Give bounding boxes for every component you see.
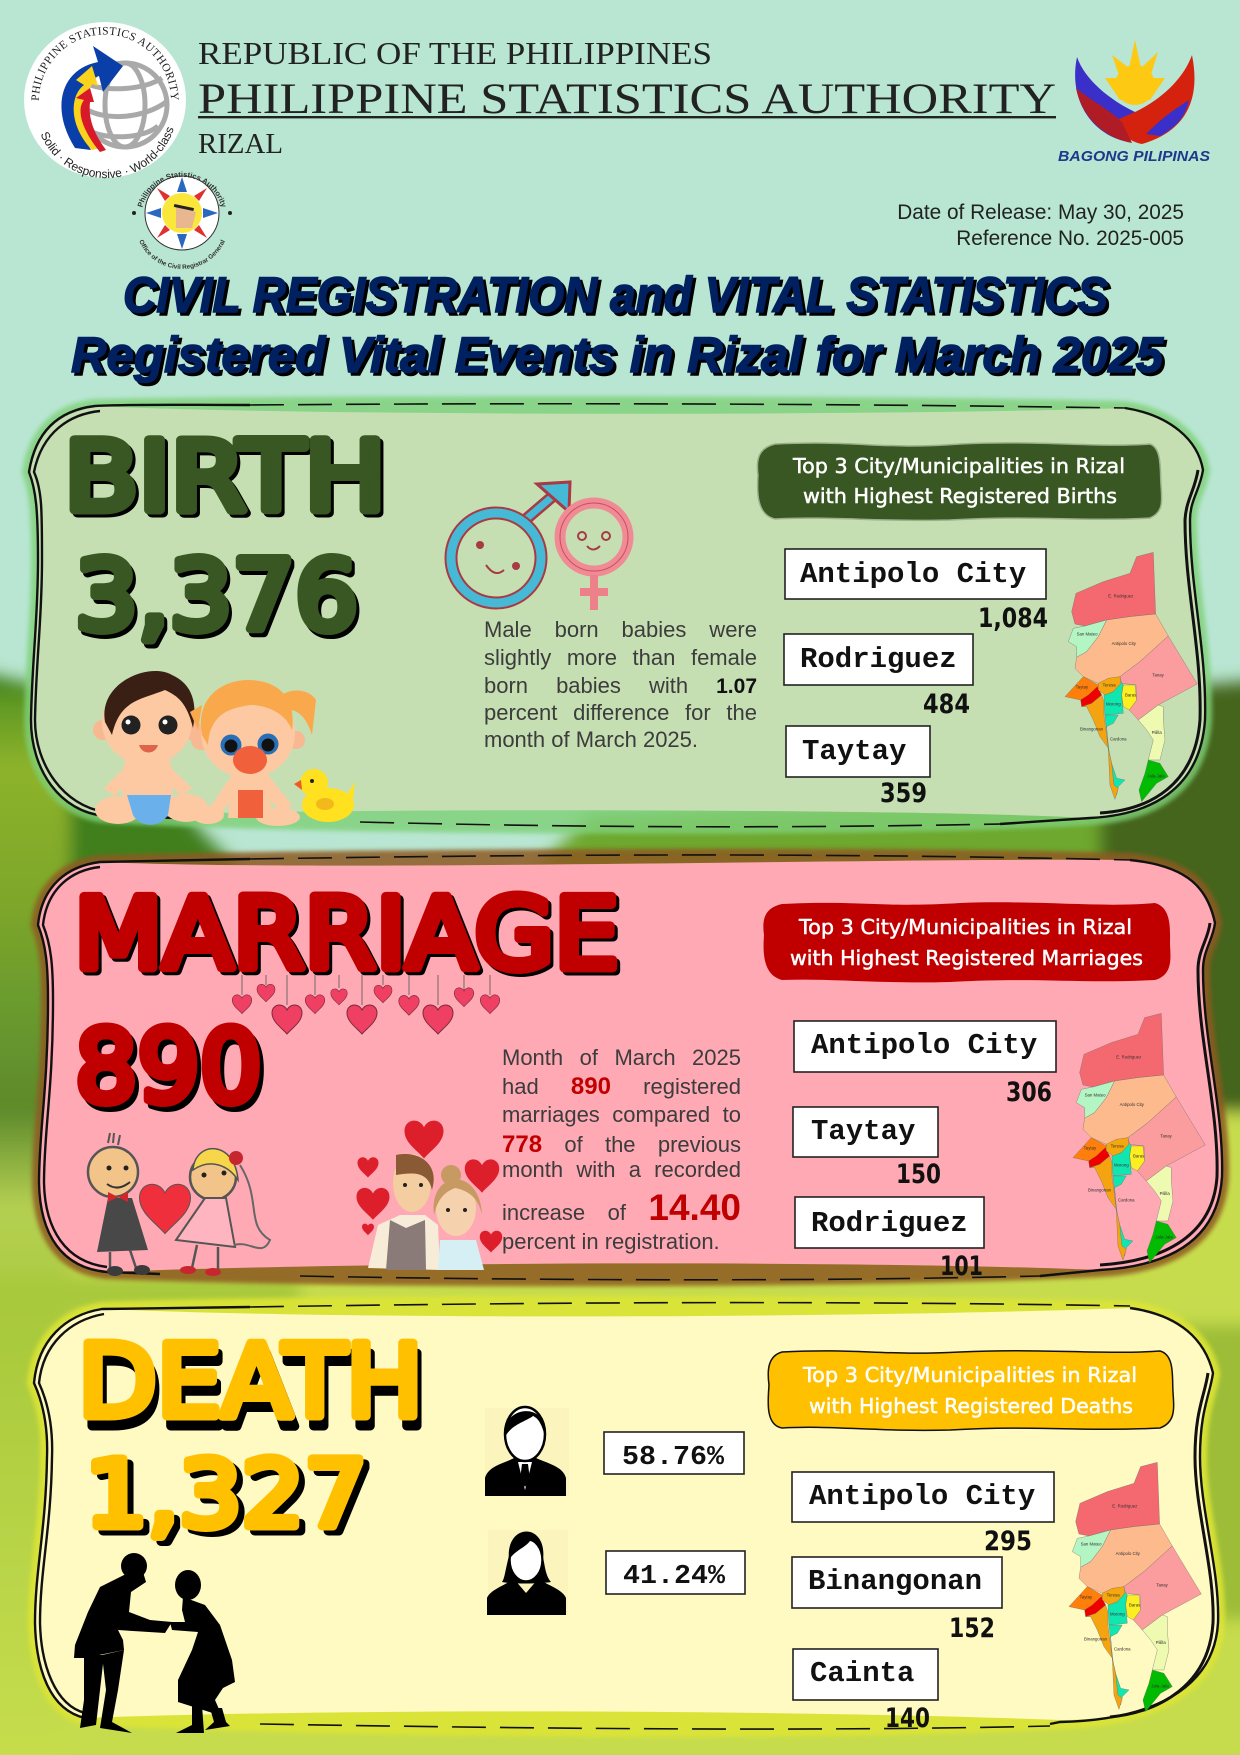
illustration: two babies and a duck bbox=[93, 671, 355, 826]
figure: female share: 41.24% bbox=[623, 1562, 726, 1592]
map: Rizal province: Antipolo City bbox=[1120, 1102, 1145, 1107]
header text bbox=[198, 35, 1056, 160]
map: Rizal province: Baras bbox=[1129, 1603, 1140, 1608]
ranking: Antipolo City 306 bbox=[794, 1021, 1056, 1108]
map: Rizal province: Baras bbox=[1125, 693, 1136, 698]
map: Rizal province: Jala-Jala bbox=[1147, 773, 1165, 778]
text: marriages description: percent in registration. bbox=[502, 1229, 720, 1254]
ranking: Taytay 359: Taytay bbox=[802, 735, 906, 768]
seal motto text: PHILIPPINE STATISTICS AUTHORITY bbox=[31, 26, 179, 101]
release info bbox=[897, 201, 1184, 250]
text: births description: month of March 2025. bbox=[484, 727, 698, 752]
ranking: Antipolo City 295: 295 bbox=[984, 1526, 1032, 1557]
registrar logo arc text: Office of the Civil Registrar General bbox=[140, 240, 225, 270]
map: Rizal province: Tanay bbox=[1160, 1134, 1173, 1139]
title: Registered Vital Events in Rizal for March 2025 bbox=[71, 327, 1164, 383]
map: Rizal province: Teresa bbox=[1103, 682, 1116, 687]
map: Rizal province: Cardona bbox=[1114, 1647, 1131, 1652]
map: Rizal province: E. Rodriguez bbox=[1112, 1503, 1137, 1508]
map: Rizal province: Antipolo City bbox=[1112, 641, 1137, 646]
map: Rizal province: Pililla bbox=[1156, 1640, 1166, 1645]
map: Rizal province: Morong bbox=[1114, 1162, 1129, 1167]
panel: birth bbox=[29, 403, 1205, 827]
ranking: Antipolo City 306: 306 bbox=[1006, 1077, 1052, 1108]
ranking: Taytay 150: 150 bbox=[896, 1159, 941, 1190]
banner: top 3 marriages bbox=[763, 902, 1170, 982]
map: Rizal province bbox=[1065, 552, 1197, 802]
map: Rizal province: Baras bbox=[1133, 1154, 1144, 1159]
map: Rizal province: Binangonan bbox=[1080, 727, 1104, 732]
ranking: Taytay 150 bbox=[793, 1107, 941, 1190]
panel: marriage bbox=[38, 855, 1222, 1282]
header text: PHILIPPINE STATISTICS AUTHORITY bbox=[198, 76, 1056, 123]
header text: REPUBLIC OF THE PHILIPPINES bbox=[198, 35, 712, 71]
illustration: stick-figure bride and groom bbox=[88, 1133, 270, 1276]
seal motto text: Solid · Responsive · World-class bbox=[42, 127, 174, 178]
heading: MARRIAGE: MARRIAGE bbox=[74, 878, 619, 992]
release info: Reference No. 2025-005 bbox=[956, 227, 1184, 250]
ranking: Antipolo City 1,084 bbox=[785, 549, 1048, 634]
text: births description: slightly more than female bbox=[484, 645, 757, 670]
logo: Philippine Statistics Authority seal bbox=[24, 22, 186, 178]
registrar logo arc text: Philippine Statistics Authority bbox=[138, 172, 226, 208]
registrar logo arc text bbox=[138, 172, 226, 270]
text: births description: born babies with 1.07 bbox=[484, 673, 757, 698]
banner: top 3 marriages: Top 3 City/Municipalities in Rizal bbox=[798, 915, 1132, 939]
title bbox=[71, 267, 1164, 383]
icon: female bbox=[487, 1530, 568, 1615]
text: births description bbox=[484, 616, 757, 756]
map: Rizal province: Jala-Jala bbox=[1155, 1234, 1173, 1239]
map: Rizal province: San Mateo bbox=[1077, 632, 1098, 637]
ranking: Antipolo City 1,084: 1,084 bbox=[978, 603, 1048, 634]
logo: Bagong Pilipinas bbox=[1058, 40, 1210, 165]
map: Rizal province: Cardona bbox=[1118, 1198, 1135, 1203]
logo caption: BAGONG PILIPINAS bbox=[1058, 148, 1210, 165]
banner: top 3 deaths bbox=[768, 1351, 1174, 1430]
map: Rizal province: Cardona bbox=[1110, 737, 1127, 742]
text: marriages description: Month of March 2025 bbox=[502, 1045, 741, 1070]
title: CIVIL REGISTRATION and VITAL STATISTICS bbox=[123, 267, 1108, 323]
map: Rizal province: San Mateo bbox=[1081, 1542, 1102, 1547]
banner: top 3 births: Top 3 City/Municipalities in Rizal bbox=[792, 454, 1125, 478]
ranking: Cainta 140 bbox=[793, 1649, 938, 1734]
ranking: Rodriguez 484: 484 bbox=[923, 689, 970, 720]
banner: top 3 marriages: with Highest Registered Marriages bbox=[790, 946, 1143, 970]
ranking: Binangonan 152: Binangonan bbox=[808, 1565, 982, 1598]
text: marriages description: marriages compared to bbox=[502, 1102, 741, 1127]
map: Rizal province: San Mateo bbox=[1085, 1093, 1106, 1098]
map: Rizal province: Pililla bbox=[1152, 730, 1162, 735]
ranking: Binangonan 152: 152 bbox=[949, 1613, 995, 1644]
map: Rizal province: Antipolo City bbox=[1116, 1551, 1141, 1556]
banner: top 3 deaths: with Highest Registered Deaths bbox=[809, 1394, 1133, 1418]
figure: male share bbox=[604, 1432, 744, 1474]
text: marriages description: month with a recorded bbox=[502, 1157, 741, 1182]
map: Rizal province: Taytay bbox=[1084, 1146, 1097, 1151]
map: Rizal province: Morong bbox=[1110, 1611, 1125, 1616]
ranking: Rodriguez 484 bbox=[784, 634, 973, 720]
ranking: Binangonan 152 bbox=[792, 1557, 1002, 1644]
map: Rizal province: Teresa bbox=[1111, 1143, 1124, 1148]
map: Rizal province: Taytay bbox=[1076, 685, 1089, 690]
ranking: Taytay 359 bbox=[786, 726, 930, 809]
map: Rizal province: Tanay bbox=[1152, 673, 1165, 678]
figure: births total: 3,376 bbox=[75, 540, 358, 652]
map: Rizal province: Tanay bbox=[1156, 1583, 1169, 1588]
icon: male and female symbols bbox=[451, 482, 628, 610]
map: Rizal province: E. Rodriguez bbox=[1116, 1054, 1141, 1059]
figure: male share: 58.76% bbox=[622, 1443, 725, 1473]
banner: top 3 births bbox=[757, 443, 1162, 520]
panel: death bbox=[34, 1303, 1218, 1734]
banner: top 3 deaths: Top 3 City/Municipalities in Rizal bbox=[802, 1363, 1137, 1387]
text: marriages description: increase of 14.40 bbox=[502, 1187, 741, 1228]
heading: BIRTH: BIRTH bbox=[64, 421, 386, 533]
ranking: Antipolo City 295 bbox=[792, 1472, 1054, 1557]
release info: Date of Release: May 30, 2025 bbox=[897, 201, 1184, 224]
text: marriages description bbox=[502, 1040, 741, 1265]
ranking: Antipolo City 295: Antipolo City bbox=[809, 1480, 1035, 1513]
map: Rizal province: Binangonan bbox=[1084, 1637, 1108, 1642]
ranking: Antipolo City 306: Antipolo City bbox=[811, 1029, 1037, 1062]
text: marriages description: 778 of the previous bbox=[502, 1131, 741, 1158]
figure: marriages total: 890 bbox=[75, 1008, 262, 1125]
map: Rizal province: Binangonan bbox=[1088, 1188, 1112, 1193]
map: Rizal province: Morong bbox=[1106, 701, 1121, 706]
ranking: Rodriguez 484: Rodriguez bbox=[800, 643, 957, 676]
seal motto text bbox=[31, 26, 179, 178]
banner: top 3 births: with Highest Registered Births bbox=[803, 484, 1117, 508]
illustration: hanging hearts bbox=[232, 975, 500, 1034]
ranking: Cainta 140: 140 bbox=[885, 1703, 930, 1734]
ranking: Rodriguez 101 bbox=[795, 1197, 984, 1282]
map: Rizal province: Taytay bbox=[1080, 1595, 1093, 1600]
heading: DEATH: DEATH bbox=[78, 1323, 423, 1440]
map: Rizal province: Pililla bbox=[1160, 1191, 1170, 1196]
text: births description: percent difference for the bbox=[484, 700, 757, 725]
figure: female share bbox=[606, 1551, 745, 1594]
ranking: Rodriguez 101: Rodriguez bbox=[811, 1207, 968, 1240]
ranking: Antipolo City 1,084: Antipolo City bbox=[800, 558, 1026, 591]
map: Rizal province: Teresa bbox=[1107, 1592, 1120, 1597]
map: Rizal province: E. Rodriguez bbox=[1108, 593, 1133, 598]
ranking: Rodriguez 101: 101 bbox=[940, 1251, 983, 1282]
ranking: Cainta 140: Cainta bbox=[810, 1657, 914, 1690]
figure: deaths total: 1,327 bbox=[85, 1441, 367, 1548]
map: Rizal province: Jala-Jala bbox=[1151, 1683, 1169, 1688]
header text: RIZAL bbox=[198, 128, 283, 160]
logo: Office of the Civil Registrar General bbox=[132, 172, 232, 270]
text: births description: Male born babies were bbox=[484, 617, 757, 642]
map: Rizal province bbox=[1073, 1013, 1205, 1263]
map: Rizal province bbox=[1069, 1462, 1201, 1712]
illustration: elderly couple silhouette bbox=[74, 1553, 235, 1733]
illustration: couple with hearts bbox=[356, 1121, 502, 1270]
icon: male bbox=[485, 1407, 569, 1496]
text: marriages description: had 890 registered bbox=[502, 1073, 741, 1100]
ranking: Taytay 150: Taytay bbox=[811, 1115, 915, 1148]
ranking: Taytay 359: 359 bbox=[880, 778, 927, 809]
